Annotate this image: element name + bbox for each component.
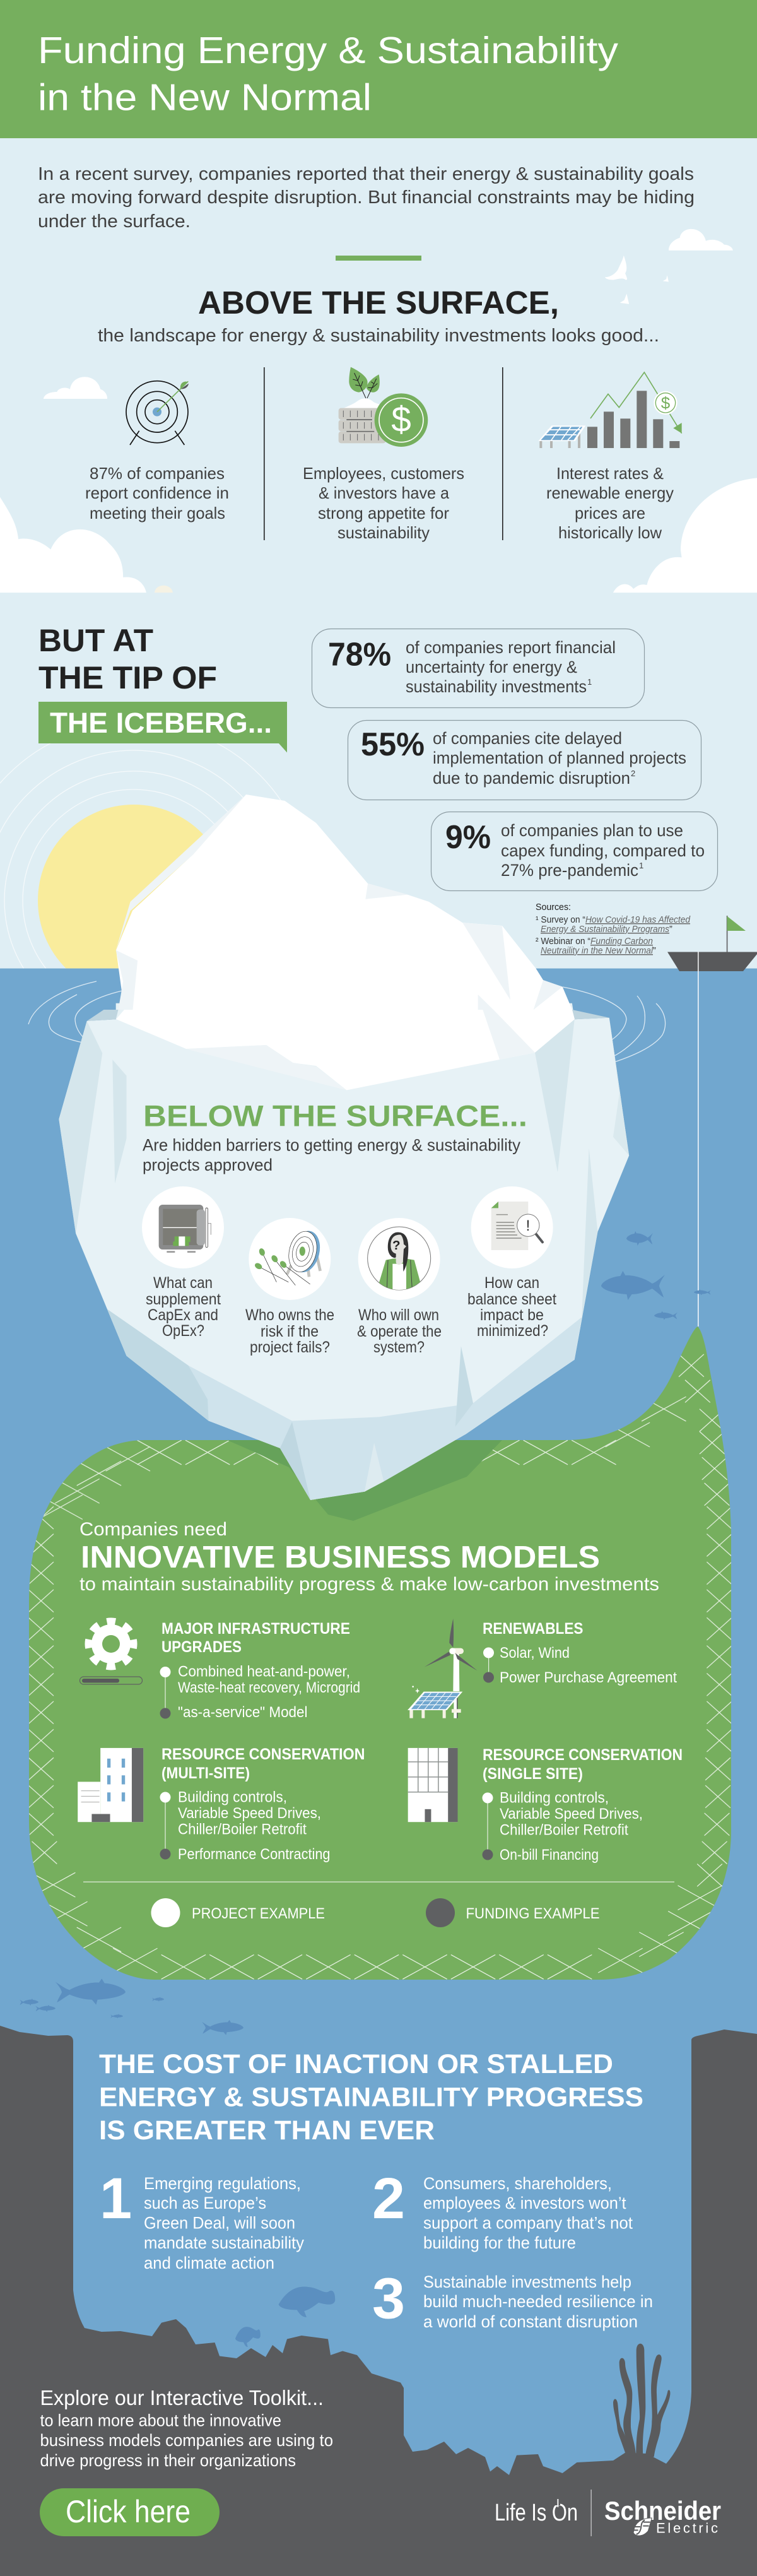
banner: the iceberg: THE ICEBERG...: [50, 707, 272, 739]
logo: life is on: Life Is On: [495, 2500, 578, 2526]
legend: PROJECT EXAMPLE: [192, 1905, 325, 1922]
model: renewables: Power Purchase Agreement: [500, 1669, 677, 1686]
column text: confidence: 87% of companies: [90, 464, 225, 483]
column text: confidence: [85, 464, 229, 523]
heading: above the surface: ABOVE THE SURFACE,: [198, 285, 559, 321]
reason 1: 1: [100, 2166, 132, 2231]
sea: [0, 969, 757, 2576]
model: resource conservation single site: Chiller/Boiler Retrofit: [500, 1822, 628, 1839]
icon: schneider mark: [633, 2518, 652, 2536]
iceberg tip above water: [116, 795, 575, 1090]
icon: wind turbine and solar panel: [408, 1619, 478, 1718]
sources: How Covid-19 has Affected: [585, 915, 691, 925]
barrier question: balance sheet: impact be: [480, 1306, 544, 1324]
fish school right: [601, 1231, 711, 1320]
barrier question: operate: & operate the: [357, 1323, 442, 1340]
call to action text: drive progress in their organizations: [40, 2451, 296, 2470]
fish school left: [20, 1978, 244, 2035]
water ripples: [28, 981, 666, 1073]
heading: cost of inaction: THE COST OF INACTION OR STALLED: [99, 2050, 613, 2079]
model: resource conservation multi-site: (MULTI-SITE): [161, 1764, 250, 1782]
barrier question: operate: [357, 1306, 442, 1356]
heading: but at the tip: THE TIP OF: [38, 660, 217, 695]
title: Funding Energy & Sustainability: [38, 30, 619, 71]
legend: [151, 1898, 599, 1927]
model: resource conservation multi-site: [160, 1746, 365, 1863]
barrier: person icon: [358, 1218, 440, 1300]
model: resource conservation multi-site: Performance Contracting: [178, 1846, 331, 1863]
stat callout 55%: implementation of planned projects: [433, 748, 686, 767]
barrier: document and magnifier icon: !: [526, 1217, 530, 1234]
logo: schneider electric: Electric: [656, 2520, 718, 2536]
stat callout 55%: 55%: [361, 726, 425, 763]
reason 2: support a company that’s not: [423, 2214, 633, 2233]
heading: below the surface: BELOW THE SURFACE...: [143, 1100, 527, 1133]
heading: innovative business models: to maintain sustainability progress & make low-carbon investments: [79, 1574, 659, 1595]
sources: Sources:: [536, 902, 571, 913]
sources: Energy & Sustainability Programs: [541, 925, 669, 935]
clouds and birds: [0, 229, 757, 593]
model: resource conservation single site: [482, 1746, 683, 1864]
heading: but at the tip: [38, 623, 217, 695]
heading: but at the tip: BUT AT: [38, 623, 153, 658]
sources: ”: [669, 925, 672, 935]
icon: multi-site buildings: [78, 1748, 143, 1822]
heading: below the surface: projects approved: [143, 1155, 273, 1174]
heading: above the surface: the landscape for energy & sustainability investments looks good...: [98, 326, 659, 346]
barrier question: operate: Who will own: [358, 1306, 439, 1324]
barrier question: risk: project fails?: [250, 1338, 330, 1356]
barrier question: risk: risk if the: [261, 1323, 319, 1340]
stat callout 9%: capex funding, compared to: [501, 841, 705, 860]
stat callout 78%: of companies report financial: [406, 638, 616, 657]
title: [38, 30, 619, 119]
heading: above the surface: [98, 285, 659, 346]
button: click here: Click here: [66, 2494, 191, 2529]
barrier question: capex: [146, 1274, 221, 1340]
intro paragraph: [38, 164, 695, 232]
barrier: safe icon: [142, 1186, 224, 1268]
reason 1: [100, 2166, 304, 2272]
barrier question: balance sheet: How can: [484, 1274, 539, 1292]
stat callout 55%: of companies cite delayed: [433, 729, 622, 748]
model: renewables: Solar, Wind: [500, 1645, 570, 1662]
column text: appetite: strong appetite for: [318, 504, 449, 523]
heading: cost of inaction: ENERGY & SUSTAINABILITY PROGRESS: [99, 2083, 643, 2113]
legend: FUNDING EXAMPLE: [466, 1905, 599, 1922]
model: resource conservation multi-site: RESOURCE CONSERVATION: [161, 1746, 365, 1763]
stat callout 78%: sustainability investments: [406, 677, 587, 696]
model: major infrastructure upgrades: UPGRADES: [161, 1638, 242, 1656]
stat callout 9%: 1: [639, 861, 643, 870]
barrier question: capex: supplement: [146, 1291, 221, 1308]
column text: rates: prices are: [575, 504, 645, 523]
barrier: target with missed darts icon: [249, 1218, 331, 1300]
column text: appetite: [303, 464, 464, 542]
column text: rates: Interest rates &: [556, 464, 664, 483]
model: major infrastructure upgrades: MAJOR INFRASTRUCTURE: [161, 1620, 350, 1638]
stat callout 9%: of companies plan to use: [501, 821, 683, 840]
barrier: person icon: ?: [392, 1238, 401, 1253]
logo: schneider electric: [604, 2496, 721, 2536]
reason 2: employees & investors won’t: [423, 2194, 626, 2213]
call to action text: [40, 2386, 333, 2470]
icon: target with arrow: [126, 381, 189, 445]
barrier question: balance sheet: minimized?: [477, 1322, 548, 1340]
call to action text: business models companies are using to: [40, 2431, 333, 2450]
column text: rates: [546, 464, 674, 542]
model: resource conservation multi-site: Building controls,: [178, 1789, 287, 1806]
model: major infrastructure upgrades: Waste-heat recovery, Microgrid: [178, 1679, 360, 1696]
heading: innovative business models: [79, 1519, 659, 1595]
model: resource conservation single site: (SINGLE SITE): [483, 1765, 583, 1783]
reason 3: a world of constant disruption: [423, 2312, 638, 2331]
heading: innovative business models: INNOVATIVE BUSINESS MODELS: [81, 1540, 600, 1575]
barrier question: balance sheet: [467, 1274, 556, 1340]
model: resource conservation single site: Variable Speed Drives,: [500, 1805, 643, 1823]
heading: innovative business models: Companies need: [79, 1519, 227, 1540]
reason 2: building for the future: [423, 2233, 576, 2252]
icon: single-site building: [408, 1748, 458, 1822]
stat callout 9%: 27% pre-pandemic: [501, 861, 638, 880]
reason 2: 2: [372, 2166, 405, 2231]
reef fish: [235, 2286, 335, 2347]
icon: coins and leaves: $: [391, 400, 411, 440]
column text: appetite: sustainability: [337, 523, 430, 542]
barrier question: balance sheet: balance sheet: [467, 1291, 556, 1308]
barrier question: risk: Who owns the: [245, 1306, 334, 1324]
model: major infrastructure upgrades: Combined heat-and-power,: [178, 1663, 350, 1681]
barrier question: capex: What can: [153, 1274, 213, 1292]
reason 1: mandate sustainability: [144, 2233, 304, 2252]
barrier: document and magnifier icon: [471, 1186, 553, 1268]
reason 2: [372, 2166, 633, 2252]
heading: cost of inaction: [99, 2050, 643, 2146]
model: resource conservation multi-site: Variable Speed Drives,: [178, 1805, 321, 1822]
stat callout 55%: [348, 721, 701, 800]
reason 1: Emerging regulations,: [144, 2174, 301, 2193]
reason 3: 3: [372, 2267, 405, 2331]
heading: cost of inaction: IS GREATER THAN EVER: [99, 2116, 435, 2146]
icon: bar chart and solar panel: $: [661, 394, 671, 413]
barrier question: risk: [245, 1306, 334, 1356]
stat callout 55%: due to pandemic disruption: [433, 769, 630, 788]
stat callout 55%: 2: [631, 769, 635, 778]
intro paragraph: under the surface.: [38, 211, 191, 232]
iceberg underwater body: [59, 1003, 629, 1500]
model: resource conservation single site: Building controls,: [500, 1790, 609, 1807]
column text: confidence: report confidence in: [85, 483, 229, 502]
model: major infrastructure upgrades: "as-a-service" Model: [178, 1704, 308, 1721]
banner: the iceberg: [38, 702, 287, 752]
sources: ”: [653, 946, 656, 956]
column text: rates: renewable energy: [546, 483, 674, 502]
sun and rings: [0, 743, 281, 968]
logo: schneider electric: Schneider: [604, 2496, 721, 2526]
iceberg: [59, 795, 629, 1500]
heading: below the surface: [143, 1100, 527, 1174]
stat callout 9%: 9%: [445, 819, 491, 856]
sources: [536, 902, 691, 956]
title: in the New Normal: [38, 77, 372, 119]
stat callout 78%: 78%: [328, 636, 391, 673]
stat callout 78%: uncertainty for energy &: [406, 658, 577, 676]
icon: coins and leaves: [339, 367, 428, 447]
column text: rates: historically low: [558, 523, 662, 542]
model: renewables: RENEWABLES: [483, 1620, 583, 1638]
barrier question: capex: CapEx and: [148, 1306, 218, 1324]
reason 2: Consumers, shareholders,: [423, 2174, 612, 2193]
seaweed: [613, 2344, 670, 2457]
sources: Neutraility in the New Normal: [541, 946, 654, 956]
reason 3: Sustainable investments help: [423, 2272, 631, 2291]
stat callout 9%: [431, 812, 718, 891]
sources: Funding Carbon: [590, 936, 653, 947]
barrier question: operate: system?: [373, 1338, 425, 1356]
reason 1: and climate action: [144, 2254, 274, 2272]
call to action text: Explore our Interactive Toolkit...: [40, 2386, 324, 2409]
icon: gear with progress bar: [79, 1621, 143, 1684]
reason 1: Green Deal, will soon: [144, 2214, 295, 2233]
model: resource conservation multi-site: Chiller/Boiler Retrofit: [178, 1821, 307, 1838]
button: click here: [40, 2488, 220, 2536]
call to action text: to learn more about the innovative: [40, 2411, 281, 2430]
reason 1: such as Europe’s: [144, 2194, 266, 2213]
green net area: [28, 1326, 732, 1980]
header band: [0, 0, 757, 138]
reason 3: build much-needed resilience in: [423, 2292, 653, 2311]
heading: below the surface: Are hidden barriers to getting energy & sustainability: [143, 1136, 520, 1155]
barrier question: capex: OpEx?: [162, 1322, 204, 1340]
reason 3: [372, 2267, 653, 2331]
sources: ² Webinar on “: [536, 936, 590, 947]
stat callout 78%: [312, 629, 645, 708]
column text: confidence: meeting their goals: [90, 504, 225, 523]
model: major infrastructure upgrades: [160, 1620, 360, 1721]
model: resource conservation single site: RESOURCE CONSERVATION: [483, 1746, 683, 1764]
column text: appetite: & investors have a: [319, 483, 450, 502]
icon: bar chart and solar panel: [538, 372, 682, 448]
column text: appetite: Employees, customers: [303, 464, 464, 483]
model: resource conservation single site: On-bill Financing: [500, 1846, 599, 1864]
intro paragraph: are moving forward despite disruption. But financial constraints may be hiding: [38, 187, 695, 208]
seabed: [0, 2026, 757, 2576]
model: renewables: [483, 1620, 677, 1686]
boat with flag and fishing line: [667, 916, 757, 1326]
sources: ¹ Survey on “: [536, 915, 585, 925]
sky background: [0, 0, 757, 969]
intro paragraph: In a recent survey, companies reported that their energy & sustainability goals: [38, 164, 694, 184]
stat callout 78%: 1: [587, 677, 592, 687]
